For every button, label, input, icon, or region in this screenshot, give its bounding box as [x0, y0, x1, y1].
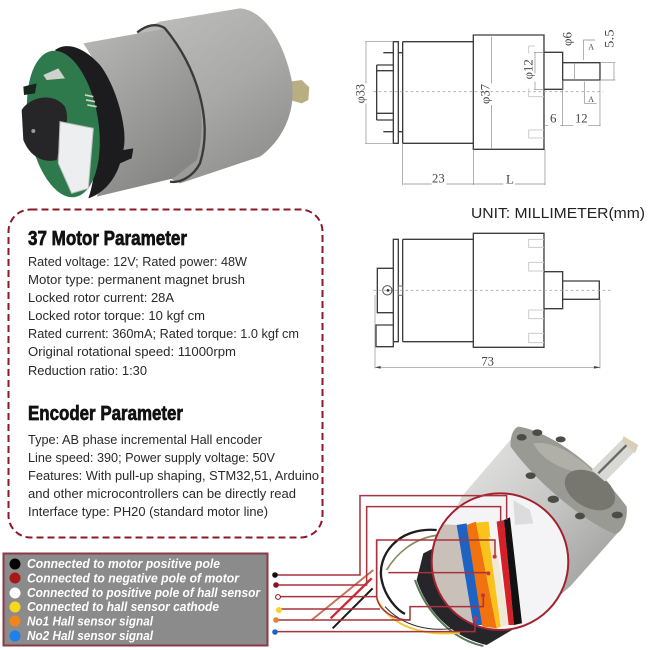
motor parameter text: Motor type: permanent magnet brush: [28, 272, 245, 287]
dimension labels: [352, 29, 616, 186]
legend: hall cathode: Connected to hall sensor cathode: [27, 600, 219, 614]
legend: hall positive: Connected to positive pole of hall sensor: [27, 586, 261, 600]
motor parameter text: Locked rotor torque: 10 kgf cm: [28, 308, 205, 323]
motor parameter text: [28, 254, 299, 378]
gearbox cylinder: [137, 8, 293, 183]
dimension labels: 6: [550, 111, 557, 126]
dimension labels: 23: [432, 171, 445, 186]
dimension labels: 5.5: [601, 29, 616, 48]
legend: motor negative: Connected to negative pole of motor: [27, 572, 240, 586]
motor parameter text: Original rotational speed: 11000rpm: [28, 344, 236, 359]
callout circle: [427, 493, 568, 630]
legend: motor positive: Connected to motor positive pole: [27, 557, 220, 571]
white connector: [58, 122, 93, 193]
wire end dots: [272, 572, 282, 635]
solder pad: [43, 68, 65, 80]
heading: Encoder Parameter: Encoder Parameter: [28, 403, 183, 425]
wiring photo: gear motor with callout: [275, 427, 638, 646]
photo: encoder gear motor: [17, 8, 309, 203]
dimension labels: A: [588, 95, 594, 104]
motor parameter text: Rated voltage: 12V; Rated power: 48W: [28, 254, 248, 269]
magnet cap: [22, 97, 67, 161]
encoder parameter text: and other microcontrollers can be directly read: [28, 486, 296, 501]
green circuit board: [17, 45, 109, 203]
dashed parameter panel: [8, 210, 322, 538]
dimension labels: φ6: [559, 32, 574, 46]
motor shaft: [290, 80, 309, 103]
motor can: [83, 28, 202, 197]
legend: hall signal 2: No2 Hall sensor signal: [27, 629, 153, 643]
dimension labels: L: [506, 171, 514, 186]
dimension label: 73: 73: [481, 353, 494, 368]
legend: hall signal 1: No1 Hall sensor signal: [27, 614, 153, 628]
encoder ring: [417, 547, 523, 645]
dimension labels: A: [588, 42, 594, 51]
unit label: UNIT: MILLIMETER(mm): [471, 205, 645, 222]
pins: [85, 95, 97, 107]
motor body: [437, 438, 623, 627]
dimension labels: φ12: [521, 59, 536, 79]
dimension labels: φ37: [477, 84, 492, 104]
black encoder ring: [55, 46, 133, 198]
gearbox face: [511, 427, 627, 534]
leader lines: [275, 496, 507, 632]
motor parameter text: Rated current: 360mA; Rated torque: 1.0 kgf cm: [28, 326, 299, 341]
cut wire ends: [312, 570, 373, 628]
legend panel: [4, 554, 268, 646]
dimension labels: 12: [575, 111, 588, 126]
dimension drawing: side view: [373, 233, 612, 369]
encoder parameter text: Type: AB phase incremental Hall encoder: [28, 432, 263, 447]
motor parameter text: Reduction ratio: 1:30: [28, 363, 147, 378]
encoder parameter text: Interface type: PH20 (standard motor line): [28, 504, 268, 519]
encoder parameter text: Line speed: 390; Power supply voltage: 50V: [28, 450, 275, 465]
joint groove: [137, 25, 205, 182]
encoder parameter text: Features: With pull-up shaping, STM32,51, Arduino: [28, 468, 319, 483]
dark board chip: [23, 83, 37, 95]
wire bundle: [377, 530, 460, 633]
motor parameter text: Locked rotor current: 28A: [28, 290, 174, 305]
output shaft: [592, 436, 638, 482]
dimension drawing: top view: [352, 29, 616, 186]
dimension labels: φ33: [352, 84, 367, 103]
heading: 37 Motor Parameter: 37 Motor Parameter: [28, 228, 187, 250]
hub: [558, 461, 622, 519]
encoder parameter text: [28, 432, 319, 519]
